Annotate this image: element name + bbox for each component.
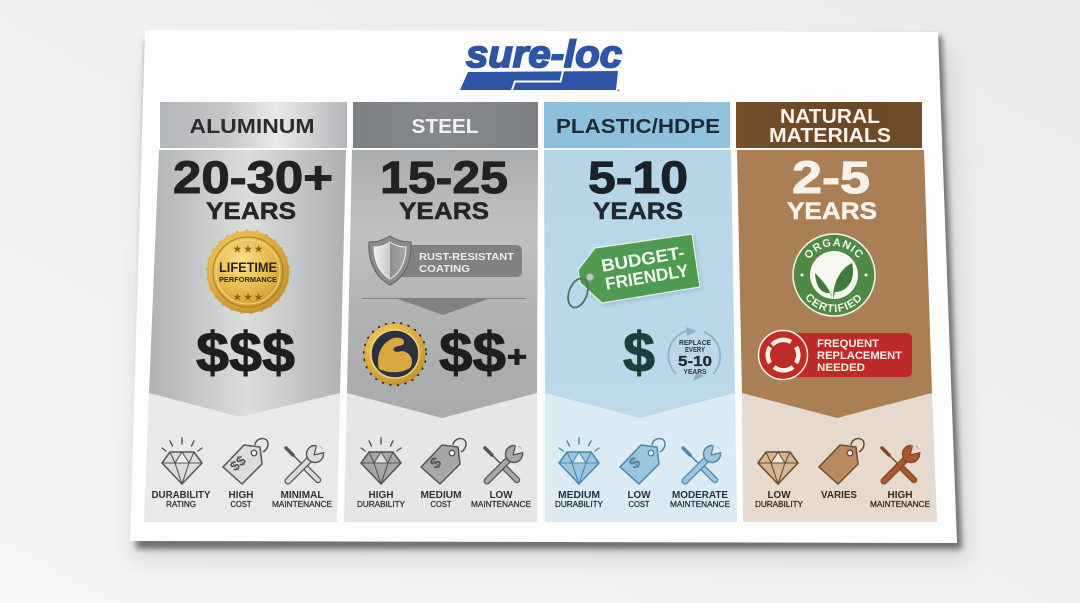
lifespan number: 20-30+: [173, 152, 333, 203]
years: YEARS: [399, 198, 489, 225]
icons and labels: [152, 438, 332, 509]
label: maintenance: MAINTENANCE: [471, 499, 531, 509]
label: maintenance: [471, 489, 531, 509]
replace every 5-10 years ring: 5-10: [678, 353, 712, 370]
badge: frequent replacement needed: NEEDED: [817, 362, 865, 374]
natural title: [769, 106, 891, 147]
badge: rust-resistant coating: COATING: [419, 263, 470, 275]
logo: sure-loc: [460, 34, 622, 93]
medal: lifetime performance: PERFORMANCE: [219, 275, 277, 284]
label: cost: HIGH: [228, 489, 254, 501]
label: maintenance: MAINTENANCE: [670, 499, 730, 509]
aluminum body: [149, 150, 346, 417]
lifespan number: 5-10: [588, 152, 688, 203]
label: durability: DURABILITY: [357, 499, 405, 509]
badge: organic certified: [792, 233, 876, 317]
heading: aluminum: [160, 102, 347, 148]
label: maintenance: [870, 489, 930, 509]
natural body: [737, 150, 932, 418]
plastic body: [544, 150, 735, 418]
icon: diamond: [162, 438, 202, 484]
icon: tools: [882, 443, 923, 481]
natural title: MATERIALS: [769, 125, 891, 147]
label: durability: DURABILITY: [755, 499, 803, 509]
badge: rust-resistant coating: RUST-RESISTANT: [419, 251, 515, 263]
panel: steel: [344, 102, 538, 522]
label: maintenance: HIGH: [888, 489, 912, 501]
label: durability: [357, 489, 405, 509]
replace every 5-10 years ring: EVERY: [685, 347, 705, 354]
medal: lifetime performance: ★ ★ ★: [233, 292, 264, 302]
label: maintenance: [670, 489, 730, 509]
tag: budget-friendly: FRIENDLY: [604, 260, 690, 294]
medal: lifetime performance: ★ ★ ★: [233, 244, 264, 254]
icon: price tag: [421, 438, 466, 484]
heading: steel: [353, 102, 538, 148]
icon: tools: [286, 443, 327, 481]
icons and labels: [555, 438, 730, 509]
label: cost: VARIES: [821, 489, 857, 501]
icon: diamond: [758, 452, 798, 484]
steel lower panel: [344, 393, 537, 522]
plastic title: PLASTIC/HDPE: [556, 116, 720, 138]
aluminum lower panel: [144, 393, 340, 522]
cost: $$+: $$: [439, 321, 506, 385]
label: durability: DURABILITY: [152, 489, 210, 501]
label: durability: LOW: [768, 489, 791, 501]
badge: organic certified: CERTIFIED: [806, 294, 861, 312]
label: durability: MEDIUM: [558, 489, 600, 501]
icon: price tag: $$: [227, 452, 249, 474]
label: maintenance: MINIMAL: [280, 489, 324, 501]
label: durability: [152, 489, 210, 509]
label: cost: [420, 489, 462, 509]
steel body: [347, 150, 538, 418]
cost: $: $: [623, 321, 655, 385]
icon: diamond: [559, 438, 599, 484]
label: durability: [555, 489, 603, 509]
replace every 5-10 years ring: [668, 327, 720, 381]
label: durability: HIGH: [368, 489, 394, 501]
years: YEARS: [593, 198, 683, 225]
icon: tools: [683, 443, 724, 481]
lifespan number: 15-25: [380, 152, 508, 203]
replace every 5-10 years ring: YEARS: [684, 369, 707, 376]
panel: aluminum: [144, 102, 347, 522]
logo: sure-loc: ®: [617, 88, 620, 93]
years: YEARS: [787, 198, 877, 225]
icon: tools: [485, 443, 526, 481]
badge: rust-resistant coating: [369, 236, 522, 285]
icon: price tag: [223, 438, 268, 484]
logo: sure-loc: sure-loc: [466, 34, 622, 76]
label: durability: DURABILITY: [555, 499, 603, 509]
label: cost: [628, 489, 651, 509]
natural title: NATURAL: [780, 106, 880, 128]
icons and labels: [755, 438, 930, 509]
label: cost: [228, 489, 254, 509]
icon: price tag: [819, 438, 864, 484]
replace every 5-10 years ring: REPLACE: [679, 340, 711, 347]
tag: budget-friendly: [564, 234, 702, 310]
divider arrow: [362, 298, 525, 315]
label: maintenance: [272, 489, 332, 509]
label: maintenance: MODERATE: [672, 489, 728, 501]
cost: $$+: +: [507, 341, 527, 374]
medal: lifetime performance: [207, 231, 289, 313]
badge: frequent replacement needed: [758, 330, 912, 380]
label: maintenance: MAINTENANCE: [272, 499, 332, 509]
cost: $$$: $$$: [196, 321, 295, 385]
plastic lower panel: [545, 393, 737, 522]
label: cost: LOW: [628, 489, 651, 501]
label: cost: MEDIUM: [420, 489, 462, 501]
badge: frequent replacement needed: FREQUENT: [817, 338, 879, 350]
tag: budget-friendly: BUDGET-: [600, 242, 686, 276]
label: durability: RATING: [166, 499, 196, 509]
label: maintenance: MAINTENANCE: [870, 499, 930, 509]
badge: frequent replacement needed: REPLACEMENT: [817, 350, 902, 362]
label: maintenance: LOW: [490, 489, 513, 501]
years: YEARS: [206, 198, 296, 225]
medal: lifetime performance: LIFETIME: [219, 260, 277, 275]
lifespan number: 2-5: [792, 152, 870, 203]
heading: plastic: [544, 102, 730, 148]
label: cost: COST: [430, 499, 452, 509]
label: durability: [755, 489, 803, 509]
natural lower panel: [742, 393, 937, 522]
icons and labels: [357, 438, 531, 509]
poster sheet: [130, 30, 957, 543]
label: cost: COST: [230, 499, 252, 509]
icon: diamond: [361, 438, 401, 484]
badge: organic certified: ORGANIC: [804, 238, 863, 258]
medal: strength: [364, 323, 426, 385]
steel title: STEEL: [412, 116, 478, 138]
icon: price tag: $: [626, 454, 644, 473]
panel: plastic/hdpe: [544, 102, 737, 522]
icon: price tag: $: [427, 454, 445, 473]
panel: natural materials: [736, 102, 937, 522]
aluminum title: ALUMINUM: [190, 116, 314, 138]
poster shadow: [130, 36, 968, 560]
icon: price tag: [620, 438, 665, 484]
label: cost: COST: [628, 499, 650, 509]
heading: natural: [736, 102, 922, 148]
